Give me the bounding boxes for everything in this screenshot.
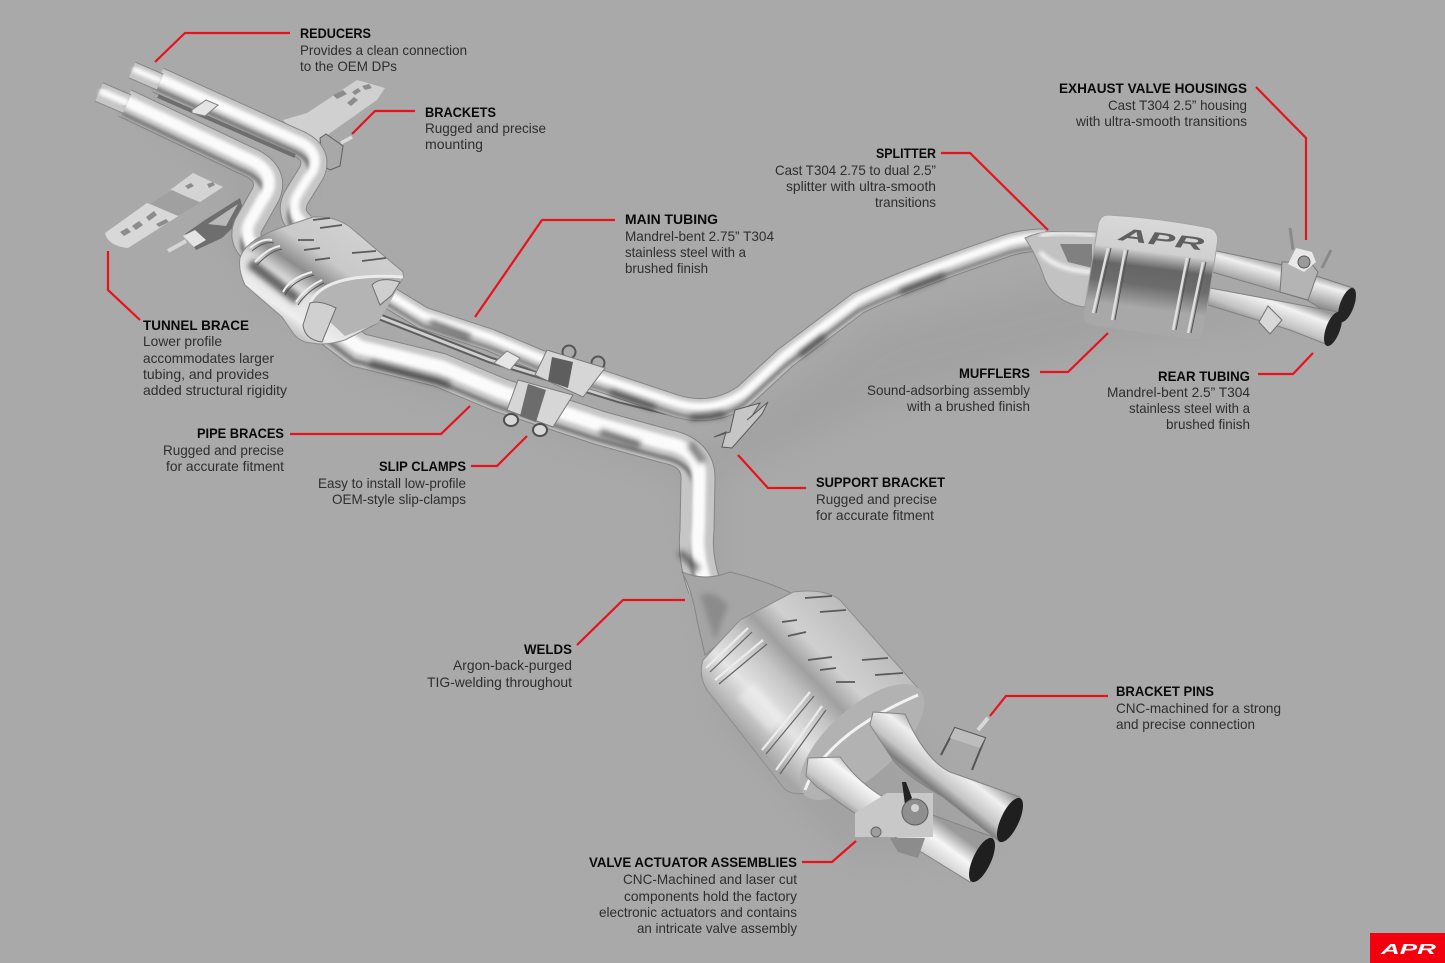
callout: mufflers (867, 333, 1108, 414)
bracket and pin, upper (320, 134, 352, 170)
callout: slip clamps: OEM-style slip-clamps (332, 491, 466, 507)
callout: rear tubing: stainless steel with a (1129, 400, 1250, 416)
logo: APR (1370, 933, 1445, 963)
bracket and pin, left (168, 198, 245, 251)
callout: brackets: BRACKETS (425, 104, 496, 120)
callout: rear tubing: Mandrel-bent 2.5” T304 (1107, 384, 1250, 400)
callout: reducers: REDUCERS (300, 25, 371, 41)
callout: mufflers: MUFFLERS (959, 365, 1030, 381)
callout: support bracket (738, 455, 945, 523)
callout: mufflers: with a brushed finish (906, 398, 1030, 414)
callout: main tubing: brushed finish (625, 260, 708, 276)
callout: reducers: Provides a clean connection (300, 42, 467, 58)
callout: main tubing: MAIN TUBING (625, 211, 718, 227)
callout: tunnel brace: tubing, and provides (143, 366, 269, 382)
callout: valve actuator assemblies: VALVE ACTUATOR ASSEMBLIES (589, 854, 797, 870)
support bracket (714, 402, 768, 448)
callout: pipe braces: for accurate fitment (166, 458, 284, 474)
callout: valve actuator assemblies: components hold the factory (624, 888, 797, 904)
right valve housing and bracket (1259, 228, 1331, 334)
rear muffler (701, 591, 943, 819)
callout: reducers: to the OEM DPs (300, 58, 397, 74)
callout: slip clamps: Easy to install low-profile (318, 475, 466, 491)
callout: tunnel brace: added structural rigidity (143, 382, 287, 398)
callout: tunnel brace: accommodates larger (143, 350, 274, 366)
callout: rear tubing: brushed finish (1166, 416, 1250, 432)
main tube, right branch (380, 237, 1045, 418)
callout: pipe braces: Rugged and precise (163, 442, 284, 458)
right muffler: APR (1115, 224, 1205, 254)
callout: exhaust valve housings: with ultra-smooth transitions (1075, 113, 1247, 129)
valve actuator plate (855, 782, 933, 858)
callout: exhaust valve housings: EXHAUST VALVE HOUSINGS (1059, 80, 1247, 96)
callout: splitter (775, 145, 1048, 230)
callout: valve actuator assemblies (589, 841, 856, 936)
callout: welds: WELDS (524, 641, 572, 657)
main tube, lower branch (321, 322, 706, 599)
callout: bracket pins: CNC-machined for a strong (1116, 700, 1281, 716)
rear left tail pipes (806, 712, 1028, 886)
callout: main tubing: stainless steel with a (625, 244, 746, 260)
pin bracket, rear (941, 718, 988, 770)
callout: splitter: transitions (875, 194, 936, 210)
inlet pipes with reducers (99, 69, 315, 262)
callout: exhaust valve housings (1059, 80, 1306, 240)
rear muffler inlet collector (682, 572, 795, 655)
callout: bracket pins: and precise connection (1116, 716, 1255, 732)
callout: tunnel brace: TUNNEL BRACE (143, 317, 249, 333)
slip clamps (504, 346, 605, 436)
callout: welds (427, 600, 685, 690)
callout: slip clamps: SLIP CLAMPS (379, 458, 466, 474)
callout: welds: Argon-back-purged (453, 657, 572, 673)
front muffler outlet collars (303, 280, 400, 342)
callout: exhaust valve housings: Cast T304 2.5” housing (1108, 97, 1247, 113)
right muffler (1084, 215, 1218, 340)
callout: tunnel brace: Lower profile (143, 333, 222, 349)
callout: main tubing (475, 211, 774, 317)
logo: APR: APR (1379, 941, 1436, 958)
callout: tunnel brace (108, 251, 287, 398)
callout: valve actuator assemblies: electronic actuators and contains (599, 904, 797, 920)
callout: bracket pins (990, 683, 1281, 732)
callout: bracket pins: BRACKET PINS (1116, 683, 1214, 699)
callout: valve actuator assemblies: CNC-Machined and laser cut (623, 871, 797, 887)
callout: main tubing: Mandrel-bent 2.75” T304 (625, 228, 774, 244)
rear tubing, right side (1208, 250, 1360, 348)
callout: support bracket: for accurate fitment (816, 507, 934, 523)
callout: splitter: SPLITTER (876, 145, 936, 161)
callout: brackets: Rugged and precise (425, 120, 546, 136)
tunnel brace plates (105, 80, 385, 248)
callout: brackets (352, 104, 546, 152)
callout: splitter: splitter with ultra-smooth (786, 178, 936, 194)
callout: support bracket: SUPPORT BRACKET (816, 474, 945, 490)
exhaust system illustration (99, 69, 1360, 886)
callout: support bracket: Rugged and precise (816, 491, 937, 507)
callout: rear tubing (1107, 353, 1313, 432)
callout: slip clamps (318, 436, 527, 507)
callout: pipe braces (163, 406, 470, 474)
callout: welds: TIG-welding throughout (427, 674, 572, 690)
soft ground shadow (130, 110, 1300, 860)
callout: valve actuator assemblies: an intricate valve assembly (637, 920, 797, 936)
pipe brace (494, 351, 520, 370)
callout: mufflers: Sound-adsorbing assembly (867, 382, 1030, 398)
callout: pipe braces: PIPE BRACES (197, 425, 284, 441)
callout: splitter: Cast T304 2.75 to dual 2.5” (775, 162, 936, 178)
callout: reducers (155, 25, 467, 74)
callout: brackets: mounting (425, 136, 483, 152)
callout: rear tubing: REAR TUBING (1158, 368, 1250, 384)
splitter and right tubes (1025, 232, 1098, 307)
front muffler (240, 217, 403, 344)
